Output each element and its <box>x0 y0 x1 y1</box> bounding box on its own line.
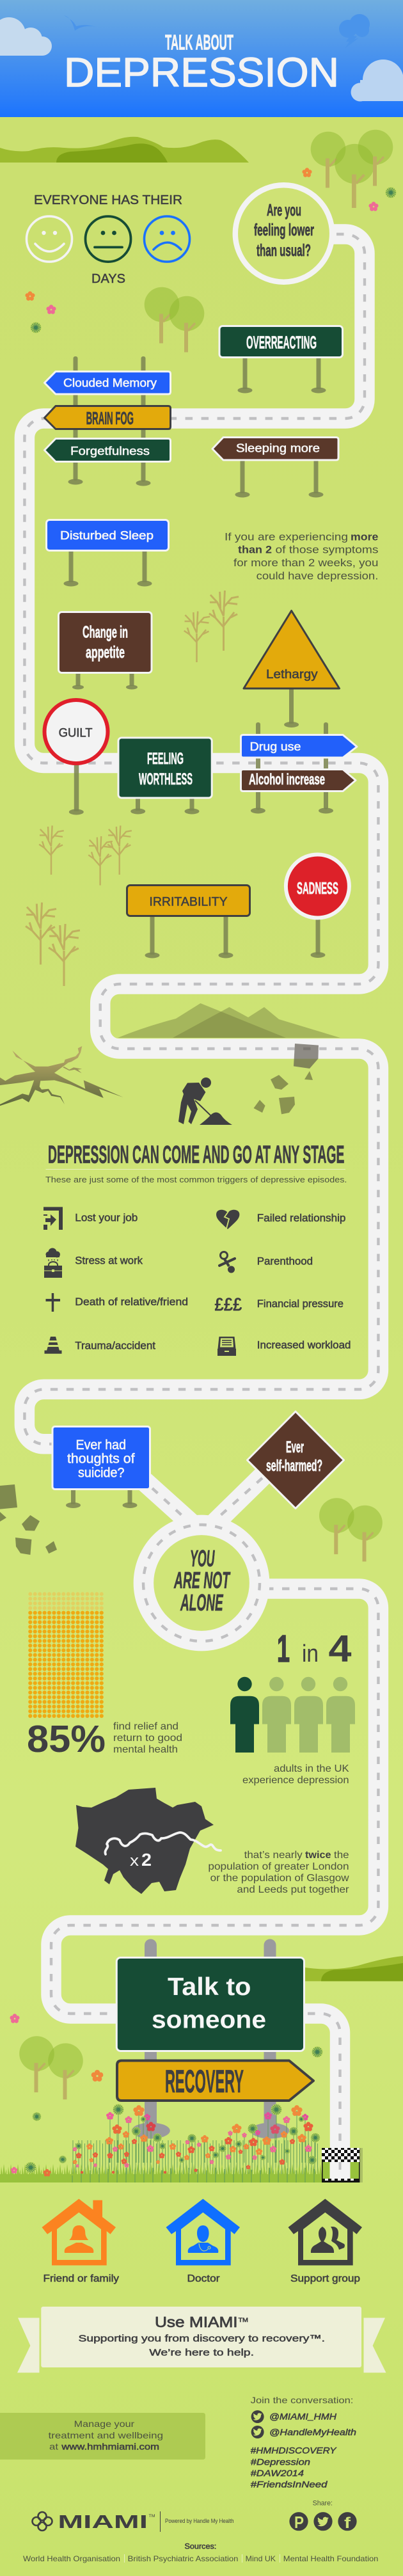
sign: sadness: SADNESS <box>297 879 338 898</box>
map: greater london: x <box>130 1852 139 1870</box>
label: failed relationship: Failed relationship <box>257 1212 345 1224</box>
hashtags: #DAW2014 <box>251 2468 304 2478</box>
feeder roads <box>122 1458 281 1524</box>
sign: suicide question: thoughts of <box>67 1451 135 1466</box>
hashtags: #Depression <box>251 2456 310 2467</box>
hills <box>0 137 249 163</box>
sign: suicide question: Ever had <box>75 1438 126 1452</box>
ribbon banner <box>17 2307 386 2373</box>
label: death: Death of relative/friend <box>75 1296 188 1308</box>
sign: irritability: IRRITABILITY <box>149 896 228 909</box>
sign: self-harm question: Ever <box>286 1438 304 1456</box>
hashtags <box>251 2445 337 2490</box>
stat: 1 in 4: 4 <box>329 1628 352 1670</box>
sad face <box>145 216 189 262</box>
dot matrix <box>28 1592 104 1719</box>
house dark <box>288 2198 362 2265</box>
ribbon banner: Use MIAMI <box>155 2314 238 2330</box>
people remaining <box>262 1677 355 1753</box>
population text: that’s nearly <box>244 1850 303 1861</box>
header panel <box>0 0 403 117</box>
alcohol sign <box>241 769 356 791</box>
posts <box>132 1939 289 2138</box>
label: financial pressure: Financial pressure <box>257 1298 344 1310</box>
sign: forgetfulness <box>45 439 170 462</box>
signs: drug use and alcohol increase <box>241 722 357 814</box>
flower meadow <box>0 2104 323 2182</box>
help option: doctor: Doctor <box>187 2273 220 2284</box>
subtitle: TALK ABOUT <box>165 31 233 54</box>
title: DEPRESSION <box>64 49 339 95</box>
posts for left sign stack <box>68 356 151 486</box>
icon: twitter <box>251 2410 264 2423</box>
icon: door <box>43 1207 63 1230</box>
question circle: Are you <box>267 200 301 219</box>
sign: suicide question <box>52 1427 150 1508</box>
population text: twice <box>305 1850 331 1861</box>
population text: or the population of Glasgow <box>210 1873 349 1884</box>
ground crack <box>0 1046 123 1106</box>
heading: everyone has their days: EVERYONE HAS THEIR <box>34 193 182 207</box>
icon: cross <box>46 1293 60 1312</box>
population text: the <box>334 1850 349 1861</box>
ribbon banner: TM <box>238 2317 248 2323</box>
social panel: @HandleMyHealth <box>269 2427 356 2437</box>
bare trees near lethargy <box>184 591 239 662</box>
stat: 85 percent: mental health <box>113 1744 178 1755</box>
icon: inbox <box>217 1337 236 1356</box>
flowers left <box>26 291 56 333</box>
icon: person digging <box>178 1077 232 1125</box>
bare trees left <box>26 825 132 986</box>
map: greater london <box>75 1788 221 1894</box>
question circle <box>235 185 332 282</box>
river thames <box>105 1833 221 1854</box>
recovery sign: someone <box>152 2007 266 2034</box>
you are not alone <box>173 1545 231 1616</box>
triggers panel <box>43 1141 351 1356</box>
hill right <box>301 1956 403 1981</box>
label: parenthood: Parenthood <box>257 1255 313 1267</box>
person <box>65 2225 93 2253</box>
road surface <box>24 234 378 1444</box>
trees near roundabout <box>319 1498 383 1561</box>
sign: self-harm question: self-harmed? <box>266 1457 322 1475</box>
sign: sleeping more: Sleeping more <box>236 441 320 454</box>
stat: 1 in 4: 1 <box>277 1628 290 1670</box>
sign: feeling worthless: WORTHLESS <box>139 770 193 788</box>
icon: pacifier <box>219 1252 235 1273</box>
sign: sadness <box>286 855 349 958</box>
sign: lethargy <box>244 610 339 727</box>
flowers around sign <box>10 2014 322 2121</box>
social panel: Join the conversation: <box>251 2395 353 2405</box>
manage your treatment box <box>0 2413 205 2460</box>
sign: irritability <box>127 886 249 958</box>
sign: change in appetite: Change in <box>83 622 128 641</box>
stat: 1 in 4: experience depression <box>242 1775 349 1786</box>
sign: overreacting <box>219 326 343 393</box>
trees bottom left <box>19 2036 83 2099</box>
icon: cloud and briefcase <box>44 1248 62 1278</box>
sign: clouded memory <box>45 372 170 394</box>
cloud left <box>0 17 52 56</box>
logo: miami: TM <box>148 2515 155 2518</box>
share icons: Share: <box>313 2500 333 2508</box>
ribbon banner: Supporting you from discovery to recovery™. <box>78 2333 325 2344</box>
sign: overreacting: OVERREACTING <box>246 333 317 353</box>
manage your treatment box: Manage your <box>74 2419 134 2429</box>
finish line <box>322 2148 363 2182</box>
sign: feeling worthless <box>118 738 212 814</box>
stems <box>72 2140 319 2182</box>
house orange <box>42 2198 116 2265</box>
label: increased workload: Increased workload <box>257 1339 351 1351</box>
sources: Sources: <box>184 2543 216 2551</box>
stat: 1 in 4 <box>230 1628 355 1786</box>
icon: traffic cone <box>45 1337 61 1354</box>
sign: suicide question: suicide? <box>78 1466 124 1481</box>
icon: broken heart <box>216 1210 239 1229</box>
road: main section <box>24 234 378 1444</box>
social panel: @MIAMI_HMH <box>269 2411 337 2421</box>
population text: population of greater London <box>208 1861 349 1872</box>
recovery sign: RECOVERY <box>165 2063 244 2099</box>
help option: support group <box>288 2198 362 2284</box>
triggers intro: These are just some of the most common triggers of depressive episodes. <box>45 1175 347 1184</box>
road dashes <box>24 234 378 1444</box>
heading: everyone has their days: DAYS <box>91 272 125 286</box>
sources <box>23 2543 378 2563</box>
symptoms note <box>225 531 379 582</box>
label: lost your job: Lost your job <box>75 1212 138 1224</box>
symptoms note: of those symptoms <box>275 544 379 556</box>
dark hill <box>56 143 168 163</box>
help option: support group: Support group <box>290 2273 360 2284</box>
share icons <box>289 2500 357 2532</box>
stat: 1 in 4: in <box>302 1641 319 1667</box>
exit road dashes <box>51 1589 378 2182</box>
you are not alone: ALONE <box>180 1589 223 1616</box>
question circle: feeling lower <box>254 220 314 239</box>
sign: disturbed sleep: Disturbed Sleep <box>60 529 154 542</box>
happy face <box>27 216 72 262</box>
sign: guilt <box>45 700 107 815</box>
sources: Mind UK <box>246 2554 276 2563</box>
icon: pounds: £££ <box>215 1295 242 1316</box>
social panel <box>251 2395 356 2490</box>
signs: drug use and alcohol increase: Drug use <box>249 740 301 753</box>
sign: change in appetite <box>59 612 152 690</box>
sign: disturbed sleep <box>46 520 169 586</box>
heading: everyone has their days <box>27 193 189 286</box>
cloud right <box>351 60 403 101</box>
map: greater london: 2 <box>141 1850 152 1870</box>
sign: clouded memory: Clouded Memory <box>63 377 157 390</box>
icon: twitter second <box>251 2426 264 2438</box>
sign: brain fog <box>45 406 170 429</box>
sign: sleeping more <box>212 438 338 498</box>
trees top right <box>311 130 393 208</box>
panel: talk to someone <box>116 1958 304 2051</box>
trees middle <box>145 287 204 352</box>
manage your treatment box: www.hmhmiami.com <box>61 2442 159 2452</box>
house blue <box>166 2198 240 2265</box>
you are not alone: ARE NOT <box>173 1567 231 1593</box>
mountains <box>118 1003 340 1038</box>
symptoms note: for more than 2 weeks, you <box>233 557 378 569</box>
symptoms note: could have depression. <box>257 569 378 582</box>
sources: World Health Organisation <box>23 2554 120 2563</box>
stat: 1 in 4: adults in the UK <box>274 1763 349 1774</box>
ring <box>143 1525 260 1641</box>
drug use sign <box>241 735 357 758</box>
sign: guilt: GUILT <box>59 726 93 740</box>
population text: and Leeds put together <box>237 1884 349 1895</box>
sources: British Psychiatric Association <box>128 2554 238 2563</box>
you are not alone: YOU <box>190 1545 215 1571</box>
help option: doctor <box>166 2198 240 2284</box>
share icons: f <box>344 2515 351 2532</box>
ribbon banner: We’re here to help. <box>149 2348 254 2358</box>
sign: brain fog: BRAIN FOG <box>86 408 134 428</box>
left rocks <box>0 1484 57 1555</box>
sign: self-harm question <box>247 1411 344 1509</box>
population text <box>208 1850 349 1895</box>
manage your treatment box: treatment and wellbeing <box>49 2430 163 2440</box>
neutral face <box>86 216 130 262</box>
sources: Mental Health Foundation <box>283 2554 378 2563</box>
rock on road <box>294 1044 319 1069</box>
arrow: recovery <box>117 2060 313 2101</box>
clover mark <box>32 2512 52 2531</box>
sign: feeling worthless: FEELING <box>147 750 184 768</box>
symptoms note: If you are experiencing <box>225 531 348 543</box>
sign: change in appetite: appetite <box>86 642 125 662</box>
flowers top right <box>302 168 397 211</box>
grass <box>0 2163 323 2182</box>
share icons: P <box>294 2513 304 2532</box>
stat: 85 percent: return to good <box>113 1733 182 1744</box>
help option: friend or family <box>42 2198 119 2284</box>
recovery sign <box>116 1939 313 2138</box>
logo: miami <box>32 2511 234 2532</box>
light hill <box>0 137 249 163</box>
sign: forgetfulness: Forgetfulness <box>70 445 150 457</box>
doctor figure <box>188 2225 218 2253</box>
symptoms note: than 2 <box>238 544 272 556</box>
help option: friend or family: Friend or family <box>43 2273 119 2284</box>
exit road surface <box>51 1589 378 2182</box>
roundabout <box>51 1458 378 2182</box>
stat: 85 percent: find relief and <box>113 1721 178 1732</box>
bird <box>64 15 97 31</box>
people <box>311 2227 345 2253</box>
logo: miami: Powered by Handle My Health <box>165 2518 234 2524</box>
question circle: than usual? <box>257 241 311 260</box>
posts <box>251 722 333 814</box>
stat: 85 percent: 85% <box>27 1718 106 1760</box>
hashtags: #FriendsInNeed <box>251 2479 328 2490</box>
hashtags: #HMHDISCOVERY <box>251 2445 337 2456</box>
symptoms note: more <box>351 531 378 543</box>
person highlighted <box>230 1677 259 1753</box>
logo: miami: MIAMI <box>58 2512 148 2532</box>
stat: 85 percent <box>27 1592 182 1760</box>
sky <box>0 0 403 117</box>
manage your treatment box: at <box>49 2442 58 2452</box>
storm cloud <box>339 14 370 49</box>
signs: drug use and alcohol increase: Alcohol increase <box>249 771 325 788</box>
falling rocks <box>253 1071 313 1114</box>
recovery sign: Talk to <box>168 1973 251 2001</box>
sign: lethargy: Lethargy <box>266 668 318 681</box>
blooms <box>11 2104 320 2177</box>
label: stress at work: Stress at work <box>75 1255 143 1267</box>
label: trauma: Trauma/accident <box>75 1340 155 1352</box>
